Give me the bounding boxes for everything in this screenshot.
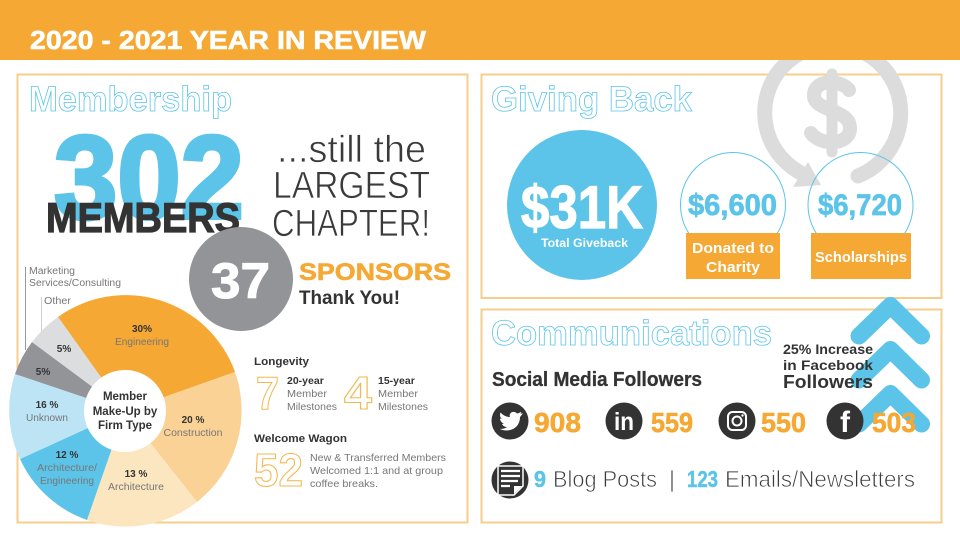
stat: linkedin: in <box>614 408 634 436</box>
section: welcome wagon: coffee breaks. <box>310 478 378 490</box>
stat: facebook: 503 <box>872 407 916 438</box>
pie chart: member make-up by firm type: Services/Consulting <box>29 278 121 289</box>
stat: scholarships: $6,720 <box>818 189 902 222</box>
pie chart: member make-up by firm type <box>9 266 242 527</box>
icon: blog posts <box>492 462 528 498</box>
text: still the largest chapter: ...still the <box>277 129 426 171</box>
heading: membership: Membership <box>29 80 232 119</box>
callout: facebook increase: in Facebook <box>783 357 873 373</box>
pie chart: member make-up by firm type: Firm Type <box>98 420 152 432</box>
stat: donated to charity: Charity <box>706 259 761 276</box>
heading: communications: Communications <box>491 314 772 353</box>
stat: total giveback: $31K <box>521 174 643 241</box>
stat: donated to charity: Donated to <box>692 240 774 257</box>
section: longevity: Member <box>287 388 328 400</box>
panel: communications <box>482 310 942 522</box>
pie chart: member make-up by firm type: Engineering <box>115 337 169 348</box>
stat: 37 sponsors: 37 <box>211 253 270 309</box>
text: still the largest chapter <box>272 129 430 245</box>
stat: 302 members: 302 <box>54 112 244 244</box>
section: longevity: Milestones <box>287 401 337 413</box>
pie chart: member make-up by firm type: Make-Up by <box>93 406 158 418</box>
text: blog posts and emails: | <box>669 466 675 492</box>
stat: 37 sponsors: SPONSORS <box>299 259 451 286</box>
section: longevity: Longevity <box>254 356 310 368</box>
heading: social media followers: Social Media Followers <box>492 369 702 391</box>
pie chart: member make-up by firm type: Member <box>103 391 148 403</box>
pie chart: member make-up by firm type: 5% <box>57 344 71 355</box>
pie chart: member make-up by firm type: Other <box>44 296 72 307</box>
header band <box>0 0 960 60</box>
section: longevity: 4 <box>344 367 372 419</box>
text: blog posts and emails: 123 <box>687 466 718 492</box>
stat: donated to charity <box>680 152 786 279</box>
section: longevity: 7 <box>256 367 279 419</box>
pie chart: member make-up by firm type: 5% <box>36 367 50 378</box>
title: 2020 - 2021 YEAR IN REVIEW <box>30 25 426 55</box>
section: welcome wagon: Welcomed 1:1 and at group <box>310 465 443 477</box>
text: blog posts and emails: Emails/Newsletters <box>725 466 915 492</box>
pie chart: member make-up by firm type: Construction <box>164 428 222 439</box>
section: longevity: Milestones <box>378 401 428 413</box>
stat: 37 sponsors: Thank You! <box>299 288 400 309</box>
stat: facebook <box>826 402 916 440</box>
stat: facebook: f <box>840 406 851 439</box>
text: blog posts and emails <box>534 466 915 492</box>
icon: up chevrons <box>859 306 922 424</box>
stat: linkedin <box>606 402 693 440</box>
pie chart: member make-up by firm type: 13 % <box>125 469 148 480</box>
text: still the largest chapter: LARGEST <box>273 165 430 207</box>
text: blog posts and emails: 9 <box>534 466 546 492</box>
callout: facebook increase <box>783 341 873 392</box>
section: welcome wagon: New & Transferred Members <box>310 452 446 464</box>
heading: giving back: Giving Back <box>491 80 693 119</box>
pie chart: member make-up by firm type: Engineering <box>40 476 94 487</box>
section: longevity: 15-year <box>378 375 415 387</box>
stat: twitter <box>492 402 581 440</box>
stat: scholarships <box>808 152 913 279</box>
pie chart: member make-up by firm type: Architecture <box>108 482 164 493</box>
stat: total giveback: Total Giveback <box>541 236 628 250</box>
stat: twitter: 908 <box>534 407 581 438</box>
stat: scholarships: Scholarships <box>815 249 907 266</box>
pie chart: member make-up by firm type: 30% <box>132 324 152 335</box>
pie chart: member make-up by firm type: Architecture/ <box>37 463 97 474</box>
stat: instagram <box>718 402 806 440</box>
pie chart: member make-up by firm type: 16 % <box>36 400 59 411</box>
text: still the largest chapter: CHAPTER! <box>272 203 430 245</box>
pie chart: member make-up by firm type: 12 % <box>56 450 79 461</box>
stat: 302 members: MEMBERS <box>46 194 240 241</box>
stat: instagram: 550 <box>761 407 806 438</box>
callout: facebook increase: 25% Increase <box>783 341 873 357</box>
section: longevity: 20-year <box>287 375 324 387</box>
pie chart: member make-up by firm type: Marketing <box>29 266 75 277</box>
pie chart: member make-up by firm type: 20 % <box>182 415 205 426</box>
stat: 37 sponsors <box>189 227 451 331</box>
stat: donated to charity: $6,600 <box>688 189 777 222</box>
section: welcome wagon: 52 <box>254 444 303 496</box>
pie chart: member make-up by firm type: Unknown <box>26 413 68 424</box>
stat: linkedin: 559 <box>651 407 693 438</box>
panel: giving back <box>482 74 942 298</box>
section: longevity <box>254 356 428 419</box>
section: welcome wagon <box>254 433 446 496</box>
section: welcome wagon: Welcome Wagon <box>254 433 347 445</box>
callout: facebook increase: Followers <box>783 372 873 392</box>
text: blog posts and emails: Blog Posts <box>553 466 657 492</box>
icon: dollar cycle <box>765 45 901 187</box>
panel: membership <box>18 74 468 522</box>
section: longevity: Member <box>378 388 419 400</box>
stat: total giveback <box>507 130 657 280</box>
